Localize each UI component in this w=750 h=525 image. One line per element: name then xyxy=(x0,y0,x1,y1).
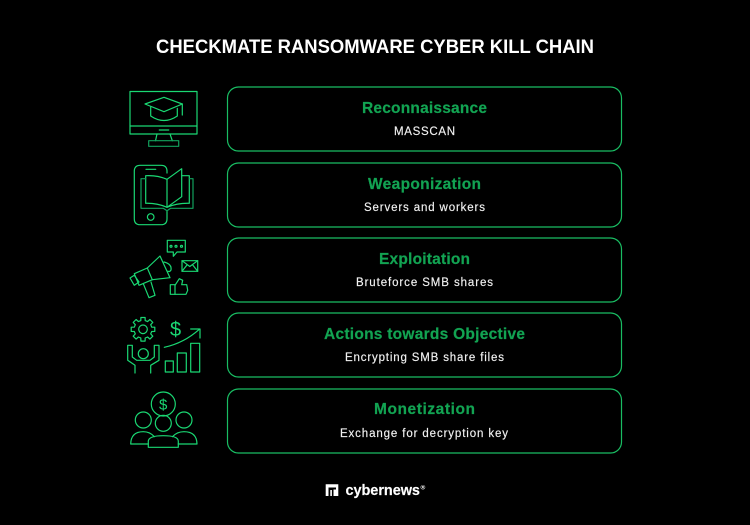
panel: exploitation xyxy=(228,238,622,302)
panel: weaponization: Weaponization xyxy=(368,176,481,193)
panel: monetization: Monetization xyxy=(374,401,475,418)
icon: megaphone with message, mail and thumbs up xyxy=(130,240,198,298)
panel: monetization xyxy=(228,389,622,453)
panel: actions towards objective: Actions towards Objective xyxy=(324,326,525,343)
logo: cybernews: cybernews xyxy=(346,483,420,499)
icon: gear, person, growth chart xyxy=(128,318,200,373)
panel: actions towards objective xyxy=(228,313,622,377)
panel: reconnaissance: Reconnaissance xyxy=(362,100,487,117)
icon: phone and open book xyxy=(134,165,193,225)
icon: gear, person, growth chart: $ xyxy=(170,319,181,341)
icon: group of people with dollar coin xyxy=(131,392,197,447)
logo: cybernews: ® xyxy=(420,484,426,492)
panel: exploitation: Exploitation xyxy=(379,251,470,268)
panel: weaponization: Servers and workers xyxy=(364,202,485,214)
panel: weaponization xyxy=(228,163,622,227)
title: CHECKMATE RANSOMWARE CYBER KILL CHAIN xyxy=(156,37,594,58)
panel: reconnaissance: MASSCAN xyxy=(394,126,455,138)
icon: monitor with graduation cap xyxy=(130,92,197,146)
panel: monetization: Exchange for decryption key xyxy=(340,428,508,440)
panel: reconnaissance xyxy=(228,87,622,151)
icon: group of people with dollar coin: $ xyxy=(159,396,168,414)
panel: exploitation: Bruteforce SMB shares xyxy=(356,277,493,289)
panel: actions towards objective: Encrypting SMB share files xyxy=(345,352,504,364)
